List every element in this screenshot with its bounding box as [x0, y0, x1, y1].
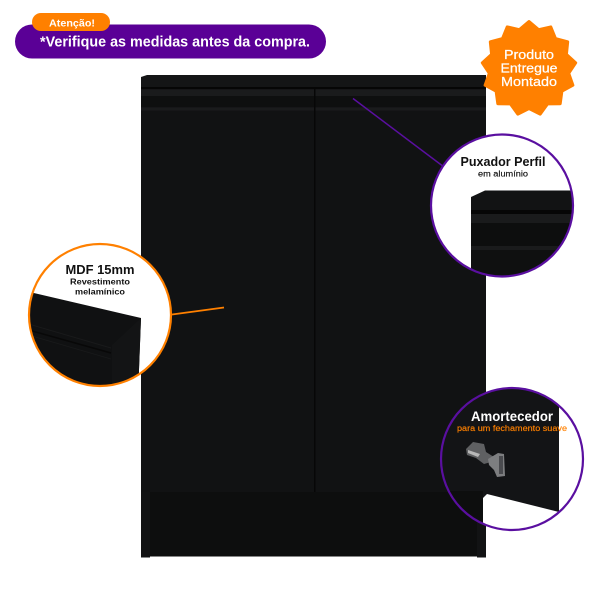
badge starburst	[482, 22, 576, 114]
callout subtitle: em alumínio	[478, 170, 529, 178]
plinth recess	[141, 492, 486, 556]
left door	[141, 89, 314, 492]
panel corner detail photo	[30, 293, 141, 385]
callout: puxador perfil	[431, 134, 581, 280]
callout subtitle	[70, 276, 130, 296]
handle profile	[141, 90, 486, 110]
callout title: Puxador Perfil	[460, 154, 546, 169]
callout title: MDF 15mm	[66, 262, 134, 277]
badge text: Produto	[504, 47, 554, 62]
leader line: handle	[353, 98, 442, 166]
callout ring	[441, 388, 583, 530]
right door	[315, 89, 486, 492]
callout background	[431, 134, 573, 276]
cabinet top slab	[141, 75, 486, 87]
banner pill	[15, 24, 326, 58]
badge text: Entregue	[500, 60, 558, 76]
icon: hinge	[466, 442, 505, 477]
badge text: Montado	[501, 74, 557, 89]
callout: amortecedor	[435, 380, 583, 535]
handle detail photo	[471, 190, 572, 276]
banner text: *Verifique as medidas antes da compra.	[40, 34, 310, 50]
cabinet	[141, 75, 486, 558]
callout subtitle: melamínico	[75, 286, 125, 296]
badge text	[500, 47, 558, 89]
attention text: Atenção!	[49, 18, 95, 30]
leader line: MDF	[172, 308, 224, 314]
callout subtitle: Revestimento	[70, 276, 130, 286]
callout subtitle: para um fechamento suave	[457, 424, 568, 433]
callout ring	[431, 134, 573, 276]
callout title: Amortecedor	[471, 409, 554, 424]
callout: MDF 15mm	[25, 244, 171, 395]
warning banner	[15, 13, 326, 58]
callout background	[441, 388, 583, 530]
door interior detail photo	[442, 389, 559, 522]
callout ring	[29, 244, 171, 386]
callout background	[29, 244, 171, 386]
badge: produto entregue montado	[482, 22, 576, 114]
attention tag	[32, 13, 110, 31]
